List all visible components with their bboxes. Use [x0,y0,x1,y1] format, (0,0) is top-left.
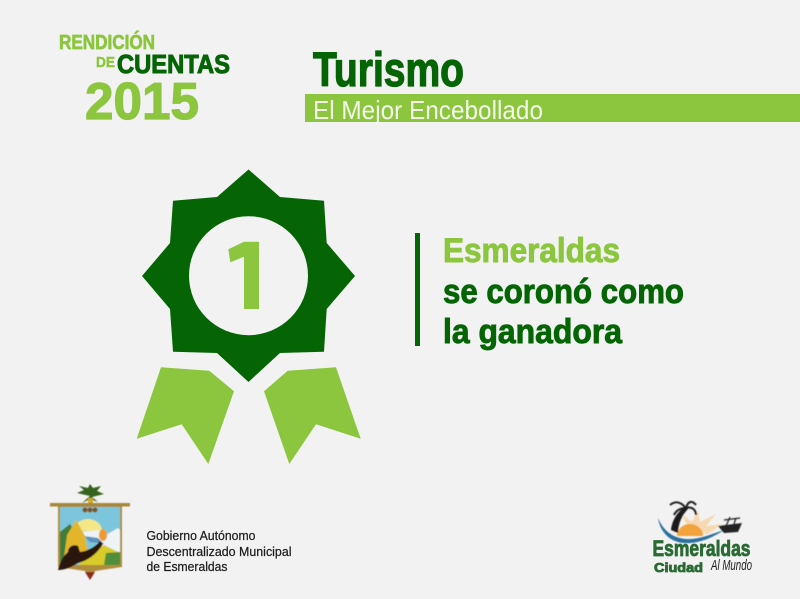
text block: institution name [146,528,292,574]
coat of arms figure [58,541,103,570]
logo: Rendición de Cuentas 2015: DE [96,54,115,71]
logo: Rendición de Cuentas 2015: 2015 [85,73,199,131]
icon: first place medal [137,170,361,464]
coat of arms shield [58,504,122,579]
logo: Rendición de Cuentas 2015: RENDICIÓN [59,30,155,54]
logo wordmark: Esmeraldas [652,536,750,561]
text block: institution name: Descentralizado Municipal [146,544,292,559]
subtitle bar: El Mejor Encebollado [305,94,800,125]
logo: Esmeraldas Ciudad Al Mundo: Ciudad [654,561,703,575]
text block: institution name: de Esmeraldas [146,559,228,574]
logo emblem [658,502,742,543]
coat of arms sun arc [74,519,102,531]
medal right ribbon [264,367,361,464]
logo: Esmeraldas Ciudad Al Mundo: Al Mundo [710,557,752,574]
coat of arms palm [77,484,104,503]
logo: Rendición de Cuentas 2015 [59,30,230,131]
medal inner circle [189,216,308,335]
logo: Rendición de Cuentas 2015: CUENTAS [117,49,230,79]
medal number 1 [228,242,259,309]
text block: winner statement: se coronó como [443,273,684,311]
logo: Esmeraldas Ciudad Al Mundo [652,502,752,575]
coat of arms cloud [80,528,120,553]
subtitle bar: El Mejor Encebollado: El Mejor Encebollado [313,95,543,125]
icon: municipal coat of arms [50,484,130,580]
text block: winner statement: Esmeraldas [443,232,620,270]
medal left ribbon [137,367,234,464]
heading: Turismo: Turismo [313,44,464,97]
medal star badge [142,170,355,382]
accent vertical bar [415,233,420,346]
text block: institution name: Gobierno Autónomo [146,528,256,543]
text block: winner statement: la ganadora [443,313,623,351]
coat of arms nuts [82,508,98,512]
coat of arms hills [60,524,75,565]
text block: winner statement [443,232,684,351]
